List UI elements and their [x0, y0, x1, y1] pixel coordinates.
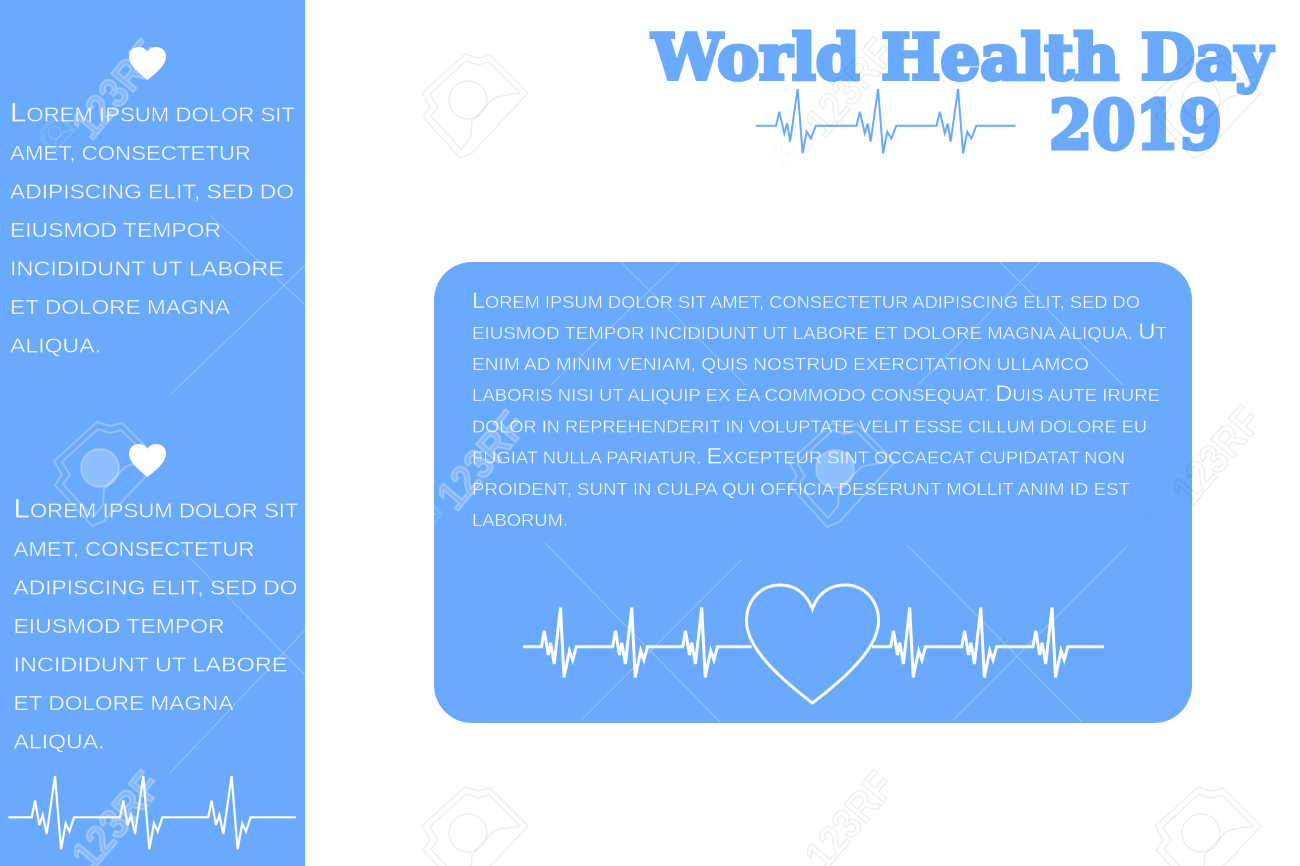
- text block: main card paragraph: DOLOR IN REPREHENDERIT IN VOLUPTATE VELIT ESSE CILLUM DOLORE EU: [472, 416, 1147, 436]
- panel: main rounded card: [434, 262, 1192, 723]
- text block: top sidebar paragraph: [10, 98, 295, 358]
- text block: main card paragraph: LOREM IPSUM DOLOR SIT AMET, CONSECTETUR ADIPISCING ELIT, SED DO: [472, 288, 1140, 313]
- text block: main card paragraph: PROIDENT, SUNT IN CULPA QUI OFFICIA DESERUNT MOLLIT ANIM ID EST: [472, 479, 1130, 499]
- text block: top sidebar paragraph: ADIPISCING ELIT, SED DO: [10, 182, 294, 204]
- text block: main card paragraph: EIUSMOD TEMPOR INCIDIDUNT UT LABORE ET DOLORE MAGNA ALIQUA. UT: [472, 319, 1167, 344]
- title: World Health Day 2019: World Health Day: [651, 20, 1274, 94]
- text block: top sidebar paragraph: INCIDIDUNT UT LABORE: [10, 258, 284, 280]
- text block: bottom sidebar paragraph: ALIQUA.: [14, 732, 104, 754]
- text block: main card paragraph: [472, 288, 1167, 530]
- text block: bottom sidebar paragraph: EIUSMOD TEMPOR: [14, 616, 224, 638]
- text block: bottom sidebar paragraph: ET DOLORE MAGNA: [14, 693, 234, 715]
- text block: top sidebar paragraph: EIUSMOD TEMPOR: [10, 220, 221, 242]
- text block: top sidebar paragraph: LOREM IPSUM DOLOR SIT: [10, 98, 295, 128]
- text block: bottom sidebar paragraph: LOREM IPSUM DOLOR SIT: [14, 494, 298, 524]
- text block: main card paragraph: LABORUM.: [472, 510, 568, 530]
- text block: main card paragraph: FUGIAT NULLA PARIATUR. EXCEPTEUR SINT OCCAECAT CUPIDATAT NON: [472, 444, 1125, 468]
- panel: left sidebar: [0, 0, 305, 866]
- text block: bottom sidebar paragraph: ADIPISCING ELIT, SED DO: [14, 578, 298, 600]
- text block: bottom sidebar paragraph: AMET, CONSECTETUR: [14, 539, 254, 561]
- icon: top sidebar heart: [129, 47, 166, 80]
- text block: top sidebar paragraph: ALIQUA.: [10, 336, 101, 358]
- icon: sidebar heartbeat line: [8, 776, 296, 849]
- text block: main card paragraph: LABORIS NISI UT ALIQUIP EX EA COMMODO CONSEQUAT. DUIS AUTE IRURE: [472, 381, 1160, 406]
- icon: heart with heartbeat line: [523, 585, 1104, 703]
- text block: bottom sidebar paragraph: [14, 494, 298, 754]
- title: World Health Day 2019: [651, 20, 1274, 164]
- title: World Health Day 2019: 2019: [1049, 86, 1222, 164]
- text block: main card paragraph: ENIM AD MINIM VENIAM, QUIS NOSTRUD EXERCITATION ULLAMCO: [472, 354, 1089, 374]
- text block: top sidebar paragraph: ET DOLORE MAGNA: [10, 297, 231, 319]
- text block: bottom sidebar paragraph: INCIDIDUNT UT LABORE: [14, 654, 288, 676]
- icon: title heartbeat line: [756, 89, 1016, 153]
- text block: top sidebar paragraph: AMET, CONSECTETUR: [10, 143, 251, 165]
- icon: bottom sidebar heart: [129, 444, 166, 477]
